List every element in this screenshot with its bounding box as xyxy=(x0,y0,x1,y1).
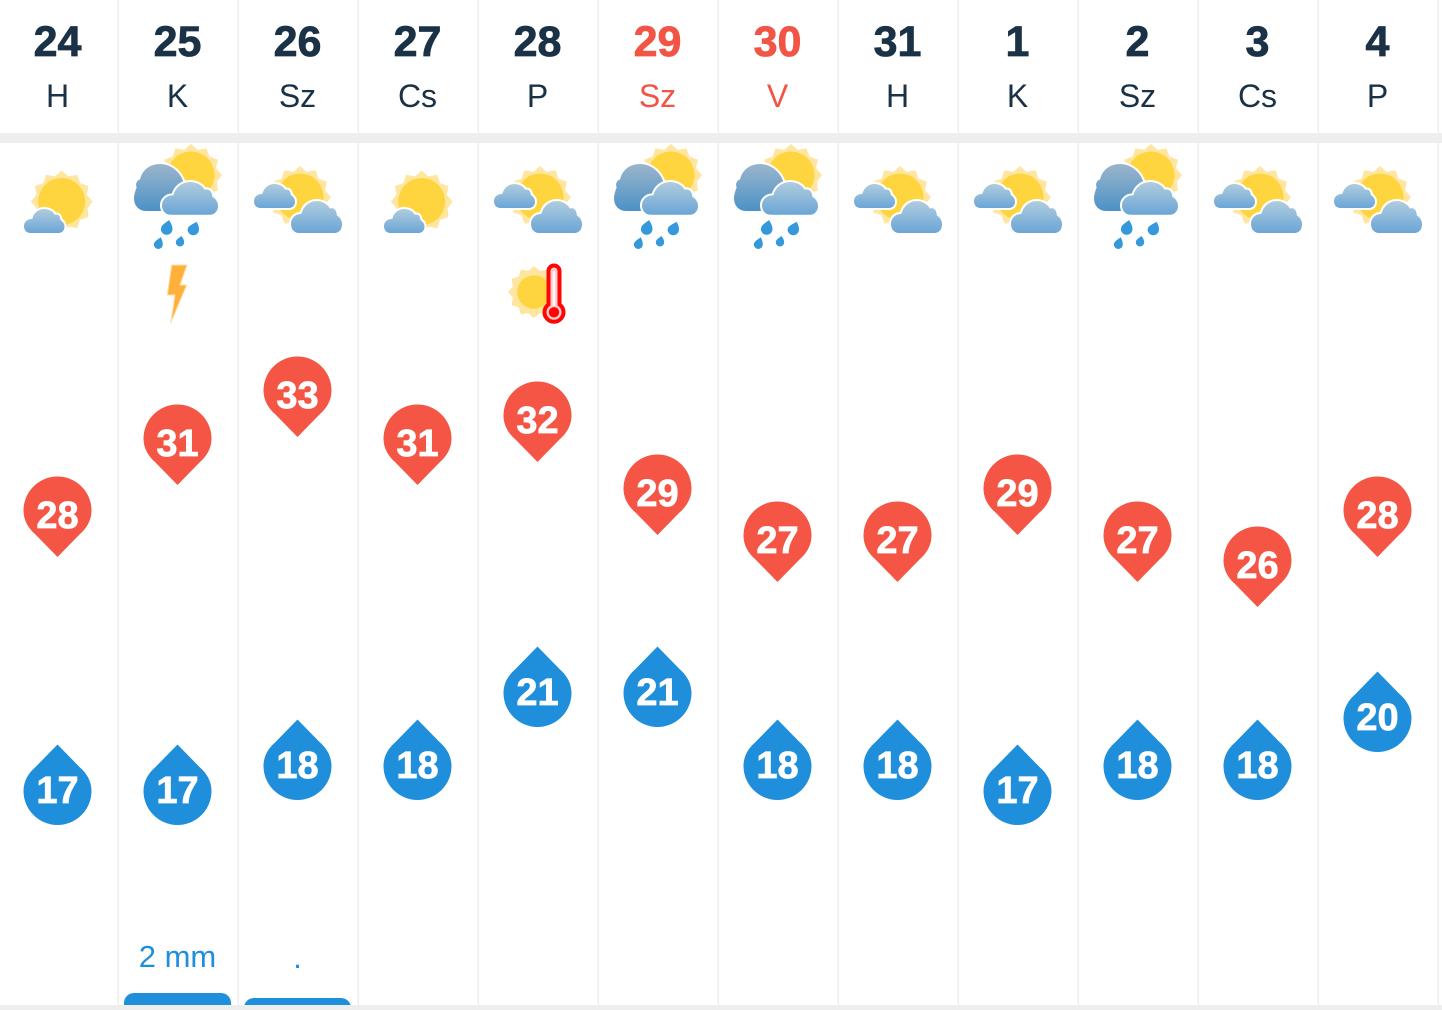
pin: 29: 29 xyxy=(996,473,1039,515)
precipitation: trace: . xyxy=(293,940,302,975)
date: 3 Cs: Cs xyxy=(1238,78,1277,114)
weather icons row xyxy=(23,144,1423,249)
date: 28 P xyxy=(514,18,561,114)
date: 30 V weekend: 30 xyxy=(754,18,801,66)
drop: 21: 21 xyxy=(636,672,679,714)
pin: 27 xyxy=(864,502,932,582)
pin: 29: 29 xyxy=(636,473,679,515)
drop: 17 xyxy=(984,744,1052,825)
drop: 20: 20 xyxy=(1356,697,1399,739)
icon: sun, clouds and rain xyxy=(133,144,222,249)
date: 25 K xyxy=(154,18,201,114)
low temperature drops xyxy=(24,646,1412,825)
pin: 31: 31 xyxy=(396,423,439,465)
pin: 27: 27 xyxy=(756,520,799,562)
icon: sun behind two clouds xyxy=(1333,166,1423,234)
pin: 27: 27 xyxy=(876,520,919,562)
icon: sun behind two clouds xyxy=(973,166,1063,234)
drop: 21: 21 xyxy=(516,672,559,714)
icon: lightning warning xyxy=(167,265,187,323)
date: 2 Sz xyxy=(1119,18,1156,114)
drop: 21 xyxy=(504,646,572,727)
date header row xyxy=(34,18,1390,114)
drop: 18: 18 xyxy=(276,745,319,787)
pin: 33 xyxy=(264,356,332,437)
drop: 18: 18 xyxy=(756,745,799,787)
date: 25 K: K xyxy=(167,78,188,114)
pin: 31: 31 xyxy=(156,423,199,465)
drop: 18 xyxy=(864,720,932,800)
date: 3 Cs xyxy=(1238,18,1277,114)
pin: 27 xyxy=(1104,502,1172,582)
drop: 18: 18 xyxy=(876,745,919,787)
drop: 18 xyxy=(744,720,812,800)
date: 27 Cs xyxy=(394,18,441,114)
drop: 18: 18 xyxy=(1116,745,1159,787)
pin: 26: 26 xyxy=(1236,545,1279,587)
pin: 28: 28 xyxy=(36,495,79,537)
high temperature pins xyxy=(24,356,1412,607)
pin: 28: 28 xyxy=(1356,495,1399,537)
drop: 21 xyxy=(624,646,692,727)
drop: 18 xyxy=(1104,720,1172,800)
date: 28 P: P xyxy=(527,78,548,114)
icon: sun with small cloud xyxy=(383,170,453,234)
date: 3 Cs: 3 xyxy=(1246,18,1269,66)
date: 2 Sz: Sz xyxy=(1119,78,1156,114)
date: 24 H: 24 xyxy=(34,18,81,66)
drop: 17: 17 xyxy=(36,770,79,812)
drop: 18: 18 xyxy=(1236,745,1279,787)
pin: 32: 32 xyxy=(516,400,559,442)
date: 29 Sz weekend: 29 xyxy=(634,18,681,66)
date: 29 Sz weekend: Sz xyxy=(639,78,676,114)
pin: 29 xyxy=(984,454,1052,535)
drop: 17 xyxy=(24,744,92,825)
drop: 18 xyxy=(1224,720,1292,800)
date: 26 Sz: 26 xyxy=(274,18,321,66)
date: 2 Sz: 2 xyxy=(1126,18,1149,66)
drop: 20 xyxy=(1344,672,1412,752)
icon: sun, clouds and rain xyxy=(613,144,702,249)
date: 24 H: H xyxy=(46,78,69,114)
icon: sun behind two clouds xyxy=(1213,166,1303,234)
pin: 31 xyxy=(144,404,212,485)
date: 29 Sz weekend xyxy=(634,18,681,114)
date: 4 P: P xyxy=(1367,78,1388,114)
date: 31 H: H xyxy=(886,78,909,114)
date: 1 K: K xyxy=(1007,78,1028,114)
icon: sun, clouds and rain xyxy=(733,144,822,249)
date: 30 V weekend: V xyxy=(767,78,789,114)
precipitation: 2 mm: 2 mm xyxy=(139,939,216,974)
icon: heat warning thermometer xyxy=(508,266,564,322)
pin: 32 xyxy=(504,382,572,462)
pin: 27 xyxy=(744,502,812,582)
precipitation: trace xyxy=(244,940,351,1008)
drop: 18 xyxy=(264,720,332,800)
pin: 26 xyxy=(1224,526,1292,607)
drop: 18 xyxy=(384,720,452,800)
icon: sun with small cloud xyxy=(23,170,93,234)
date: 1 K xyxy=(1006,18,1029,114)
date: 31 H: 31 xyxy=(874,18,921,66)
date: 26 Sz xyxy=(274,18,321,114)
date: 24 H xyxy=(34,18,81,114)
drop: 17 xyxy=(144,744,212,825)
drop: 18: 18 xyxy=(396,745,439,787)
date: 4 P: 4 xyxy=(1366,18,1390,66)
date: 25 K: 25 xyxy=(154,18,201,66)
pin: 28 xyxy=(24,476,92,557)
date: 4 P xyxy=(1366,18,1390,114)
drop: 17: 17 xyxy=(996,770,1039,812)
date: 27 Cs: 27 xyxy=(394,18,441,66)
icon: sun behind two clouds xyxy=(853,166,943,234)
icon: sun, clouds and rain xyxy=(1093,144,1182,249)
pin: 31 xyxy=(384,404,452,485)
date: 30 V weekend xyxy=(754,18,801,114)
pin: 33: 33 xyxy=(276,375,319,417)
pin: 28 xyxy=(1344,476,1412,557)
date: 28 P: 28 xyxy=(514,18,561,66)
date: 1 K: 1 xyxy=(1006,18,1029,66)
drop: 17: 17 xyxy=(156,770,199,812)
date: 26 Sz: Sz xyxy=(279,78,316,114)
precipitation: 2 mm xyxy=(124,939,231,1006)
pin: 29 xyxy=(624,454,692,535)
icon: sun behind two clouds xyxy=(493,166,583,234)
date: 31 H xyxy=(874,18,921,114)
date: 27 Cs: Cs xyxy=(398,78,437,114)
icon: sun behind two clouds xyxy=(253,166,343,234)
pin: 27: 27 xyxy=(1116,520,1159,562)
